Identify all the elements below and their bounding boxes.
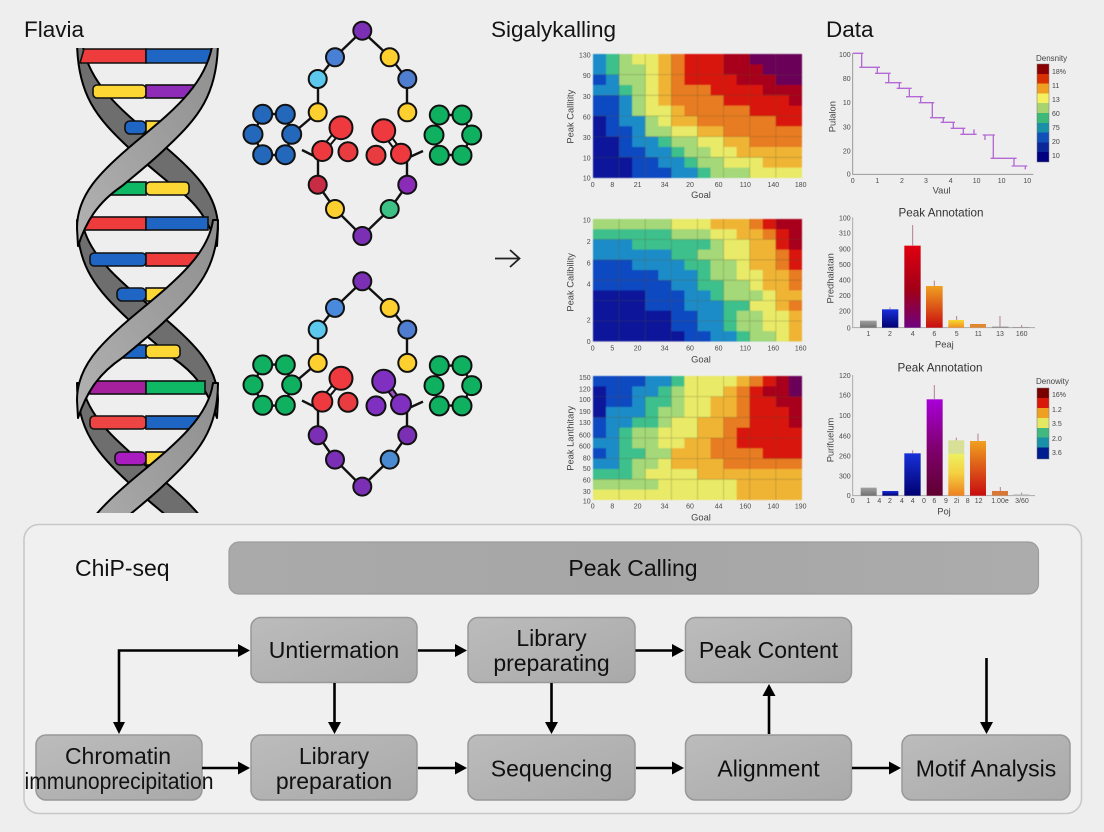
arrow: Alignment to Peak Content [762,684,776,734]
axis labels: 400 [839,277,851,284]
colour bar [1037,64,1049,162]
heatmap axes labels: 20 [634,345,642,352]
diagram: upper molecular network [244,22,481,245]
arrow: Chromatin to Library preparation [202,762,250,774]
axis labels: 160 [1016,331,1028,338]
heatmap axes labels: 190 [579,409,591,416]
legend values: 3.6 [1052,450,1062,457]
legend values: 1.2 [1052,407,1062,414]
label: ChiP-seq: ChiP-seq [75,555,170,581]
icon: DNA double helix [76,48,219,513]
heatmap axes labels: 60 [686,345,694,352]
legend values [1052,392,1066,457]
heatmap axes labels: 50 [583,466,591,473]
heatmap axes labels: 30 [583,489,591,496]
bond left [322,379,341,402]
heatmap axes labels: 150 [579,375,591,382]
axis labels: 0 [847,326,851,333]
bond right [384,382,401,405]
heatmap axes labels: Goal [691,354,711,364]
axis labels: 100 [839,52,851,59]
nodes [244,272,481,496]
heatmap axes labels: 21 [634,182,642,189]
heatmap axes labels: 8 [610,182,614,189]
heatmap 2 [565,217,807,364]
axis labels: 310 [839,231,851,238]
axis labels: 0 [851,178,855,185]
box: Untiermation: Untiermation [269,637,399,663]
bonds inner [322,128,401,154]
axes [853,217,1035,328]
heatmap axes labels [565,375,807,523]
heatmap axes labels: 160 [767,345,779,352]
heatmap axes labels: 44 [715,504,723,511]
bond right inner [384,382,401,405]
axis labels: 9 [944,498,948,505]
heatmap axes labels: Peak Calibility [565,253,575,312]
bonds double [322,128,401,154]
axis labels: 8 [966,498,970,505]
heatmap axes labels: Peak Callitity [565,89,575,144]
box: Library preparation [251,735,417,800]
heatmap axes labels: 160 [795,345,807,352]
arrow: Sequencing to Alignment [636,762,684,774]
box: Alignment: Alignment [717,756,820,782]
axis labels: 4 [877,498,881,505]
heatmap axes labels: 10 [583,498,591,505]
heatmap axes labels: 6 [587,261,591,268]
box: Sequencing [468,735,635,800]
axis labels: 160 [839,392,851,399]
axis labels [825,216,1028,350]
box: Motif Analysis [902,735,1070,800]
heatmap axes labels: 20 [686,182,694,189]
heatmap cells [593,219,802,341]
axis labels [825,373,1029,516]
axis labels: 10 [1023,178,1031,185]
axis labels: 10 [843,100,851,107]
box: Untiermation [251,618,417,682]
heatmap axes labels: 100 [579,397,591,404]
legend title: Denowity [1036,377,1069,386]
heatmap axes labels: 60 [715,182,723,189]
heatmap axes labels: 190 [795,504,807,511]
axis labels: 6 [932,331,936,338]
box: Chromatin immunoprecipitation: Chromatin [65,743,171,769]
axis labels: 1 [866,498,870,505]
heading: Sigalykalling: Sigalykalling [491,17,616,42]
heatmap axes labels: 60 [715,345,723,352]
axis labels [827,52,1031,195]
axis labels: 200 [839,293,851,300]
box: Library preparation: Library [299,743,370,769]
axis labels: 4 [911,331,915,338]
heading: Flavia: Flavia [24,17,85,42]
arrow: networks to heatmaps [495,250,520,267]
axis labels: 0 [851,498,855,505]
colour bar [1037,388,1049,459]
heatmap axes labels: 60 [583,115,591,122]
axis labels: 3 [924,178,928,185]
bar chart: Peak Annotation lower [825,361,1035,516]
heatmap axes labels: 140 [767,182,779,189]
heatmap axes labels: Peak Lanthitary [565,406,575,471]
front strand [76,48,219,513]
step line chart [827,52,1033,195]
axis labels: 100 [839,216,851,223]
arrow: into Motif Analysis [980,658,993,734]
legend values [1052,69,1066,160]
axis labels: 10 [973,178,981,185]
axis labels: Vaul [933,185,951,195]
heatmap axes labels: 110 [740,345,751,352]
heatmap axes labels: 0 [591,182,595,189]
axis labels: 0 [922,498,926,505]
heatmap axes labels: 130 [579,420,591,427]
heatmap axes labels: 34 [661,182,669,189]
axis labels: 5 [955,331,959,338]
heatmap axes labels: 140 [767,504,779,511]
legend values: 20 [1052,139,1060,146]
axis labels: 10 [998,178,1006,185]
heatmap axes labels [565,217,807,364]
axis labels: 0 [847,172,851,179]
axis labels: 20 [843,149,851,156]
heatmap axes labels: 0 [591,504,595,511]
axis labels: 200 [839,309,851,316]
chart title: Peak Annotation [898,361,982,374]
header bar: Peak Calling [229,542,1038,594]
bars [861,399,1029,496]
box: Library preparating: preparating [493,650,610,676]
heading: Data: Data [826,17,874,42]
error bars [890,225,1022,327]
axis labels: 120 [839,373,851,380]
box: Chromatin immunoprecipitation [24,735,214,800]
nodes [244,22,481,245]
heatmap axes labels: 10 [583,176,591,183]
heatmap axes labels: 0 [591,345,595,352]
heatmap axes labels [565,52,807,200]
legend values: 10 [1052,153,1060,160]
axis labels: 4 [900,498,904,505]
axis labels: 0 [847,493,851,500]
heatmap axes labels: 600 [579,444,591,451]
legend values: 18% [1052,69,1066,76]
heatmap 3 [565,375,807,523]
header bar: Peak Calling: Peak Calling [568,555,698,581]
axis labels: 260 [839,453,851,460]
axis labels: 2 [900,178,904,185]
legend: density colour bar bottom [1036,377,1069,459]
legend values: 11 [1052,83,1059,90]
axes [853,375,1035,496]
heatmap axes labels: 120 [579,386,591,393]
legend values: 16% [1052,392,1066,399]
heatmap axes labels: 34 [661,345,669,352]
box: Sequencing: Sequencing [491,756,612,782]
box: Peak Content [686,618,852,682]
back strand [76,48,219,513]
heatmap axes labels: 2 [587,317,591,324]
heatmap axes labels: 80 [583,456,591,463]
heatmap axes labels: 34 [661,504,669,511]
axis labels: Pulalon [827,101,837,132]
heatmap axes labels: 20 [634,504,642,511]
axis labels: Predhalatan [825,253,835,303]
heatmap axes labels: 10 [583,155,591,162]
legend values: 3.5 [1052,421,1062,428]
box: Peak Content: Peak Content [699,637,839,663]
arrow: Alignment to Motif Analysis [852,762,901,774]
heatmap axes labels: Goal [691,190,711,200]
box: Library preparation: preparation [276,768,392,794]
axis labels: 13 [996,331,1004,338]
bar chart: Peak Annotation upper [825,206,1035,350]
box: Motif Analysis: Motif Analysis [916,756,1056,782]
heatmap axes labels: 600 [579,432,591,439]
bonds [253,31,472,236]
axis labels: Purifuelum [825,417,835,462]
heatmap axes labels: 180 [795,182,807,189]
axis labels: 500 [839,262,851,269]
heatmap axes labels: 4 [587,281,591,288]
chart title: Peak Annotation [899,206,983,219]
axis labels: 6 [932,498,936,505]
axis labels: 900 [839,247,851,254]
heatmap 1 [565,52,807,200]
box: Library preparating: Library [516,625,587,651]
arrow: Library preparating to Sequencing [545,683,558,734]
heatmap axes labels: 160 [739,504,751,511]
heatmap axes labels: 110 [740,182,751,189]
arrow: Library preparation to Sequencing [418,762,467,774]
heatmap axes labels: 8 [610,504,614,511]
axes [853,53,1033,174]
axis labels: 1.00e [991,498,1009,505]
heatmap axes labels: 2 [587,239,591,246]
axis labels: 1 [875,178,879,185]
arrow: Untiermation to Library preparation [328,683,341,734]
axis labels: 3/60 [1015,498,1029,505]
legend values: 13 [1052,97,1060,104]
axis labels: 100 [839,413,851,420]
heatmap axes labels: 10 [583,217,591,224]
heatmap axes labels: Goal [691,513,711,523]
bonds [253,282,472,487]
axis labels: 11 [975,331,982,338]
base pair rungs [80,49,215,465]
axis labels: 300 [839,474,851,481]
heatmap axes labels: 0 [587,339,591,346]
heatmap axes labels: 60 [686,504,694,511]
panel: ChIP-seq workflow [24,524,1082,814]
legend: density colour bar top [1036,54,1067,162]
legend title: Densnity [1036,54,1067,63]
heatmap axes labels: 5 [610,345,614,352]
bond left inner [322,379,341,402]
heatmap axes labels: 60 [583,477,591,484]
axis labels: 1 [866,331,870,338]
axis labels: 2i [954,498,960,505]
axis labels: 30 [843,125,851,132]
box: Library preparating [468,618,635,682]
step line [853,53,1027,169]
axis labels: 2 [888,331,892,338]
axis labels: Poj [937,506,951,516]
axis labels: Peaj [935,340,954,350]
legend values: 75 [1052,125,1060,132]
heatmap axes labels: 130 [579,52,591,59]
arrow: Library preparating to Peak Content [636,644,684,657]
axis labels: 460 [839,433,851,440]
heatmap axes labels: 30 [583,94,591,101]
diagram: lower molecular network [244,272,481,496]
heatmap cells [593,54,802,178]
axis labels: 80 [843,76,851,83]
axis labels: 12 [975,498,983,505]
axis labels: 2 [888,498,892,505]
heatmap axes labels: 30 [583,135,591,142]
panel background [24,524,1082,814]
legend values: 2.0 [1052,436,1062,443]
axis labels: 4 [949,178,953,185]
legend values: 60 [1052,111,1060,118]
box: Alignment [686,735,852,800]
heatmap cells [593,376,802,500]
arrow: Chromatin to Untiermation (bidirectional elbow) [113,644,250,734]
bars [860,246,1029,328]
error bars [913,385,1022,494]
axis labels: 4 [911,498,915,505]
box: Chromatin immunoprecipitation: immunoprecipitation [24,768,214,794]
heatmap axes labels: 90 [583,73,591,80]
arrow: Untiermation to Library preparating [418,644,467,657]
